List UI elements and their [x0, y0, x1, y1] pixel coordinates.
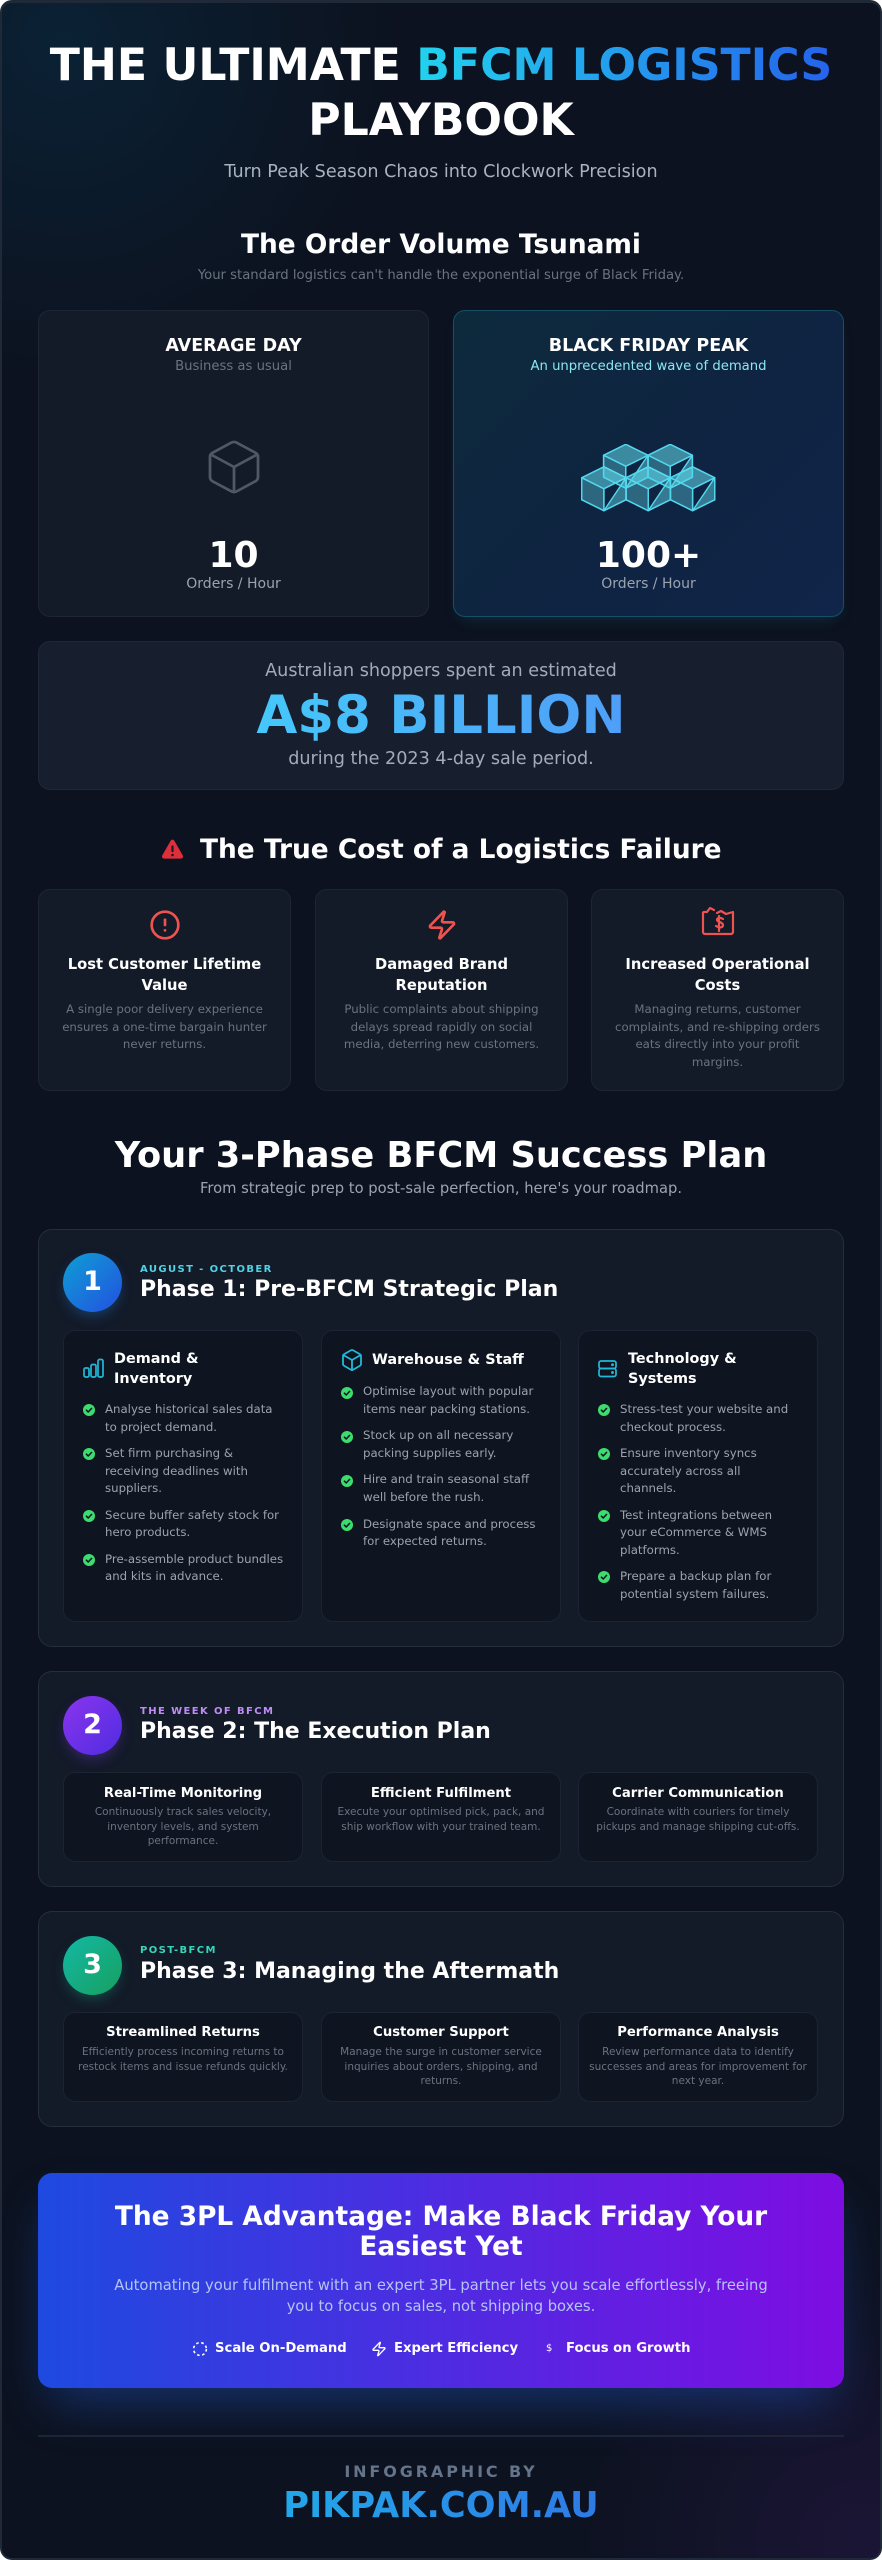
peak orders number: 100+	[596, 535, 701, 576]
card text: Continuously track sales velocity,	[95, 1806, 271, 1818]
demand list: suppliers.	[105, 1481, 162, 1495]
benefit: expert efficiency	[372, 2341, 518, 2356]
icon: server	[598, 1360, 617, 1378]
card text	[589, 2046, 807, 2087]
phase 1 background	[38, 1229, 844, 1647]
icon: warning triangle	[162, 840, 184, 859]
benefit: focus on growth	[546, 2341, 690, 2356]
card text: Coordinate with couriers for timely	[607, 1806, 789, 1818]
credit label: INFOGRAPHIC BY	[344, 2462, 538, 2481]
warehouse title: Warehouse & Staff	[372, 1352, 524, 1368]
title	[50, 40, 832, 146]
average orders number: 10	[208, 535, 259, 576]
card text	[78, 2046, 288, 2073]
card title	[68, 956, 261, 994]
icon: stacked boxes	[581, 444, 716, 512]
cta text	[114, 2277, 768, 2315]
card title: Reputation	[396, 977, 487, 994]
icon: folder with dollar	[702, 906, 734, 936]
callout figure: A$8 BILLION	[256, 685, 626, 746]
credit brand: PIKPAK.COM.AU	[283, 2485, 599, 2526]
demand list: Secure buffer safety stock for	[105, 1508, 279, 1522]
callout tail: during the 2023 4-day sale period.	[288, 749, 594, 769]
card text: successes and areas for improvement for	[589, 2061, 807, 2073]
warehouse list	[341, 1384, 536, 1548]
benefit label: Scale On-Demand	[215, 2341, 347, 2356]
card title	[625, 956, 810, 994]
card text: ensures a one-time bargain hunter	[62, 1020, 267, 1034]
phase 2 title: Phase 2: The Execution Plan	[140, 1719, 491, 1744]
card title: Carrier Communication	[612, 1786, 784, 1801]
phase 3 badge	[63, 1936, 122, 1995]
card text: Public complaints about shipping	[344, 1002, 539, 1016]
card text	[344, 1002, 539, 1051]
demand title: Inventory	[114, 1371, 192, 1387]
card text: delays spread rapidly on social	[351, 1020, 532, 1034]
demand list: receiving deadlines with	[105, 1464, 248, 1478]
warehouse list: Optimise layout with popular	[363, 1384, 533, 1398]
warehouse list: for expected returns.	[363, 1534, 487, 1548]
icon: bar chart	[83, 1358, 104, 1378]
panel: phase 1	[38, 1229, 844, 1647]
phase 3 background	[38, 1911, 844, 2127]
cta text: you to focus on sales, not shipping boxes.	[287, 2298, 595, 2315]
heading: 3-phase plan: Your 3-Phase BFCM Success Plan	[115, 1135, 767, 1176]
benefit label: Expert Efficiency	[394, 2341, 518, 2356]
card text: media, deterring new customers.	[344, 1037, 539, 1051]
panel: phase 1: and kits in advance.	[105, 1569, 224, 1583]
technology list: Test integrations between	[620, 1508, 772, 1522]
panel: 3PL advantage call to action	[38, 2173, 844, 2388]
card title: Performance Analysis	[617, 2025, 779, 2040]
warehouse list: well before the rush.	[363, 1490, 484, 1504]
warehouse list: packing supplies early.	[363, 1446, 496, 1460]
heading: the order volume tsunami: The Order Volume Tsunami	[241, 229, 641, 260]
technology list: Ensure inventory syncs	[620, 1446, 757, 1460]
demand list: Set firm purchasing &	[105, 1446, 233, 1460]
peak orders unit: Orders / Hour	[601, 576, 696, 592]
phase 1 timing: AUGUST - OCTOBER	[140, 1264, 273, 1275]
technology title: Systems	[628, 1371, 697, 1387]
card text: returns.	[421, 2075, 461, 2087]
demand list: to project demand.	[105, 1420, 217, 1434]
card text: ship workflow with your trained team.	[341, 1821, 541, 1833]
cta title	[115, 2201, 768, 2262]
heading text: The True Cost of a Logistics Failure	[200, 834, 722, 865]
subheading: roadmap: From strategic prep to post-sale perfection, here's your roadmap.	[200, 1180, 682, 1197]
panel: damaged brand reputation	[315, 889, 568, 1091]
card text: eats directly into your profit	[635, 1037, 800, 1051]
panel: lost customer lifetime value	[38, 889, 291, 1091]
callout: A$8 billion	[38, 641, 844, 790]
card title: Costs	[695, 977, 740, 994]
demand list: Analyse historical sales data	[105, 1402, 273, 1416]
card: streamlined returns	[63, 2012, 303, 2102]
phase 2 timing: THE WEEK OF BFCM	[140, 1706, 274, 1717]
card text: inventory levels, and system	[107, 1821, 259, 1833]
technology list	[598, 1402, 788, 1601]
card title: Real-Time Monitoring	[104, 1786, 262, 1801]
card: carrier communication	[578, 1772, 818, 1862]
technology title	[628, 1351, 737, 1387]
phase 1 badge: 1	[83, 1266, 102, 1297]
card text: performance.	[148, 1835, 218, 1847]
icon: single box	[208, 440, 260, 494]
phase 2 badge	[63, 1696, 122, 1755]
card title: Damaged Brand	[375, 956, 508, 973]
column: technology and systems	[578, 1330, 818, 1622]
technology list: Stress-test your website and	[620, 1402, 788, 1416]
benefit label: Focus on Growth	[566, 2341, 690, 2356]
panel: average day	[38, 310, 429, 617]
card text: A single poor delivery experience	[66, 1002, 263, 1016]
card text: restock items and issue refunds quickly.	[78, 2061, 288, 2073]
warehouse list: items near packing stations.	[363, 1402, 530, 1416]
card text: Managing returns, customer	[634, 1002, 801, 1016]
card text	[95, 1806, 271, 1847]
card title: Value	[141, 977, 188, 994]
technology list: checkout process.	[620, 1420, 726, 1434]
phase 1 title: Phase 1: Pre-BFCM Strategic Plan	[140, 1277, 558, 1302]
demand list	[83, 1402, 283, 1583]
cta title: The 3PL Advantage: Make Black Friday Your	[115, 2201, 767, 2232]
phase 3 timing: POST-BFCM	[140, 1945, 217, 1956]
card text	[596, 1806, 800, 1833]
card title: Streamlined Returns	[106, 2025, 260, 2040]
icon: dollar: $	[546, 2343, 552, 2354]
card: performance analysis	[578, 2012, 818, 2102]
card text: pickups and manage shipping cut-offs.	[596, 1821, 800, 1833]
title: THE ULTIMATE BFCM LOGISTICS	[50, 40, 832, 91]
column: demand and inventory	[63, 1330, 303, 1622]
warehouse list: Stock up on all necessary	[363, 1428, 513, 1442]
peak heading: BLACK FRIDAY PEAK	[549, 336, 748, 356]
demand title	[114, 1351, 199, 1387]
card title: Increased Operational	[625, 956, 810, 973]
technology list: channels.	[620, 1481, 676, 1495]
icon: lightning	[372, 2342, 386, 2356]
average day heading: AVERAGE DAY	[165, 336, 302, 356]
panel: black friday peak	[453, 310, 844, 617]
card title: Lost Customer Lifetime	[68, 956, 261, 973]
card title: Efficient Fulfilment	[371, 1786, 511, 1801]
average orders unit: Orders / Hour	[186, 576, 281, 592]
card title	[375, 956, 508, 994]
panel: phase 1: potential system failures.	[620, 1587, 769, 1601]
benefit: scale on-demand	[192, 2341, 347, 2356]
title: PLAYBOOK	[308, 95, 574, 146]
panel: increased operational costs	[591, 889, 844, 1091]
heading: true cost	[162, 834, 722, 865]
icon: lightning	[428, 910, 456, 940]
phase 2 badge: 2	[83, 1709, 102, 1740]
demand title: Demand &	[114, 1351, 199, 1367]
card: real-time monitoring	[63, 1772, 303, 1862]
card text	[340, 2046, 542, 2087]
card text: never returns.	[123, 1037, 206, 1051]
subtitle: Turn Peak Season Chaos into Clockwork Precision	[224, 162, 658, 182]
warehouse list: Designate space and process	[363, 1516, 536, 1530]
card text: Execute your optimised pick, pack, and	[338, 1806, 544, 1818]
card text: complaints, and re-shipping orders	[615, 1020, 820, 1034]
card text: Manage the surge in customer service	[340, 2046, 542, 2058]
warehouse list: Hire and train seasonal staff	[363, 1472, 529, 1486]
demand list: Pre-assemble product bundles	[105, 1552, 283, 1566]
peak note: An unprecedented wave of demand	[530, 359, 766, 374]
column: warehouse and staff	[321, 1330, 561, 1622]
card: customer support	[321, 2012, 561, 2102]
technology list: platforms.	[620, 1543, 680, 1557]
cta title: Easiest Yet	[359, 2231, 523, 2262]
cta text: Automating your fulfilment with an expert 3PL partner lets you scale effortlessly, freeing	[114, 2277, 768, 2294]
callout lead-in: Australian shoppers spent an estimated	[265, 661, 617, 681]
card text	[338, 1806, 544, 1833]
technology list: accurately across all	[620, 1464, 741, 1478]
icon: alert circle	[150, 910, 180, 940]
phase 3 title: Phase 3: Managing the Aftermath	[140, 1959, 559, 1984]
panel: phase 2	[38, 1671, 844, 1887]
icon: dotted loader	[192, 2342, 208, 2356]
card text	[615, 1002, 820, 1069]
card text: inquiries about orders, shipping, and	[344, 2061, 538, 2073]
card text: Review performance data to identify	[602, 2046, 794, 2058]
phase 3 badge: 3	[83, 1949, 102, 1980]
card text: next year.	[672, 2075, 724, 2087]
technology list: your eCommerce & WMS	[620, 1525, 767, 1539]
demand list: hero products.	[105, 1525, 190, 1539]
card text: margins.	[692, 1055, 743, 1069]
average day note: Business as usual	[175, 359, 292, 374]
icon: box	[342, 1349, 362, 1371]
phase 2 background	[38, 1671, 844, 1887]
card title: Customer Support	[373, 2025, 509, 2040]
subheading: tsunami: Your standard logistics can't handle the exponential surge of Black Friday.	[198, 268, 684, 283]
card text	[62, 1002, 267, 1051]
card text: Efficiently process incoming returns to	[82, 2046, 284, 2058]
technology title: Technology &	[628, 1351, 737, 1367]
card: efficient fulfilment	[321, 1772, 561, 1862]
phase 1 badge	[63, 1253, 122, 1312]
technology list: Prepare a backup plan for	[620, 1569, 771, 1583]
